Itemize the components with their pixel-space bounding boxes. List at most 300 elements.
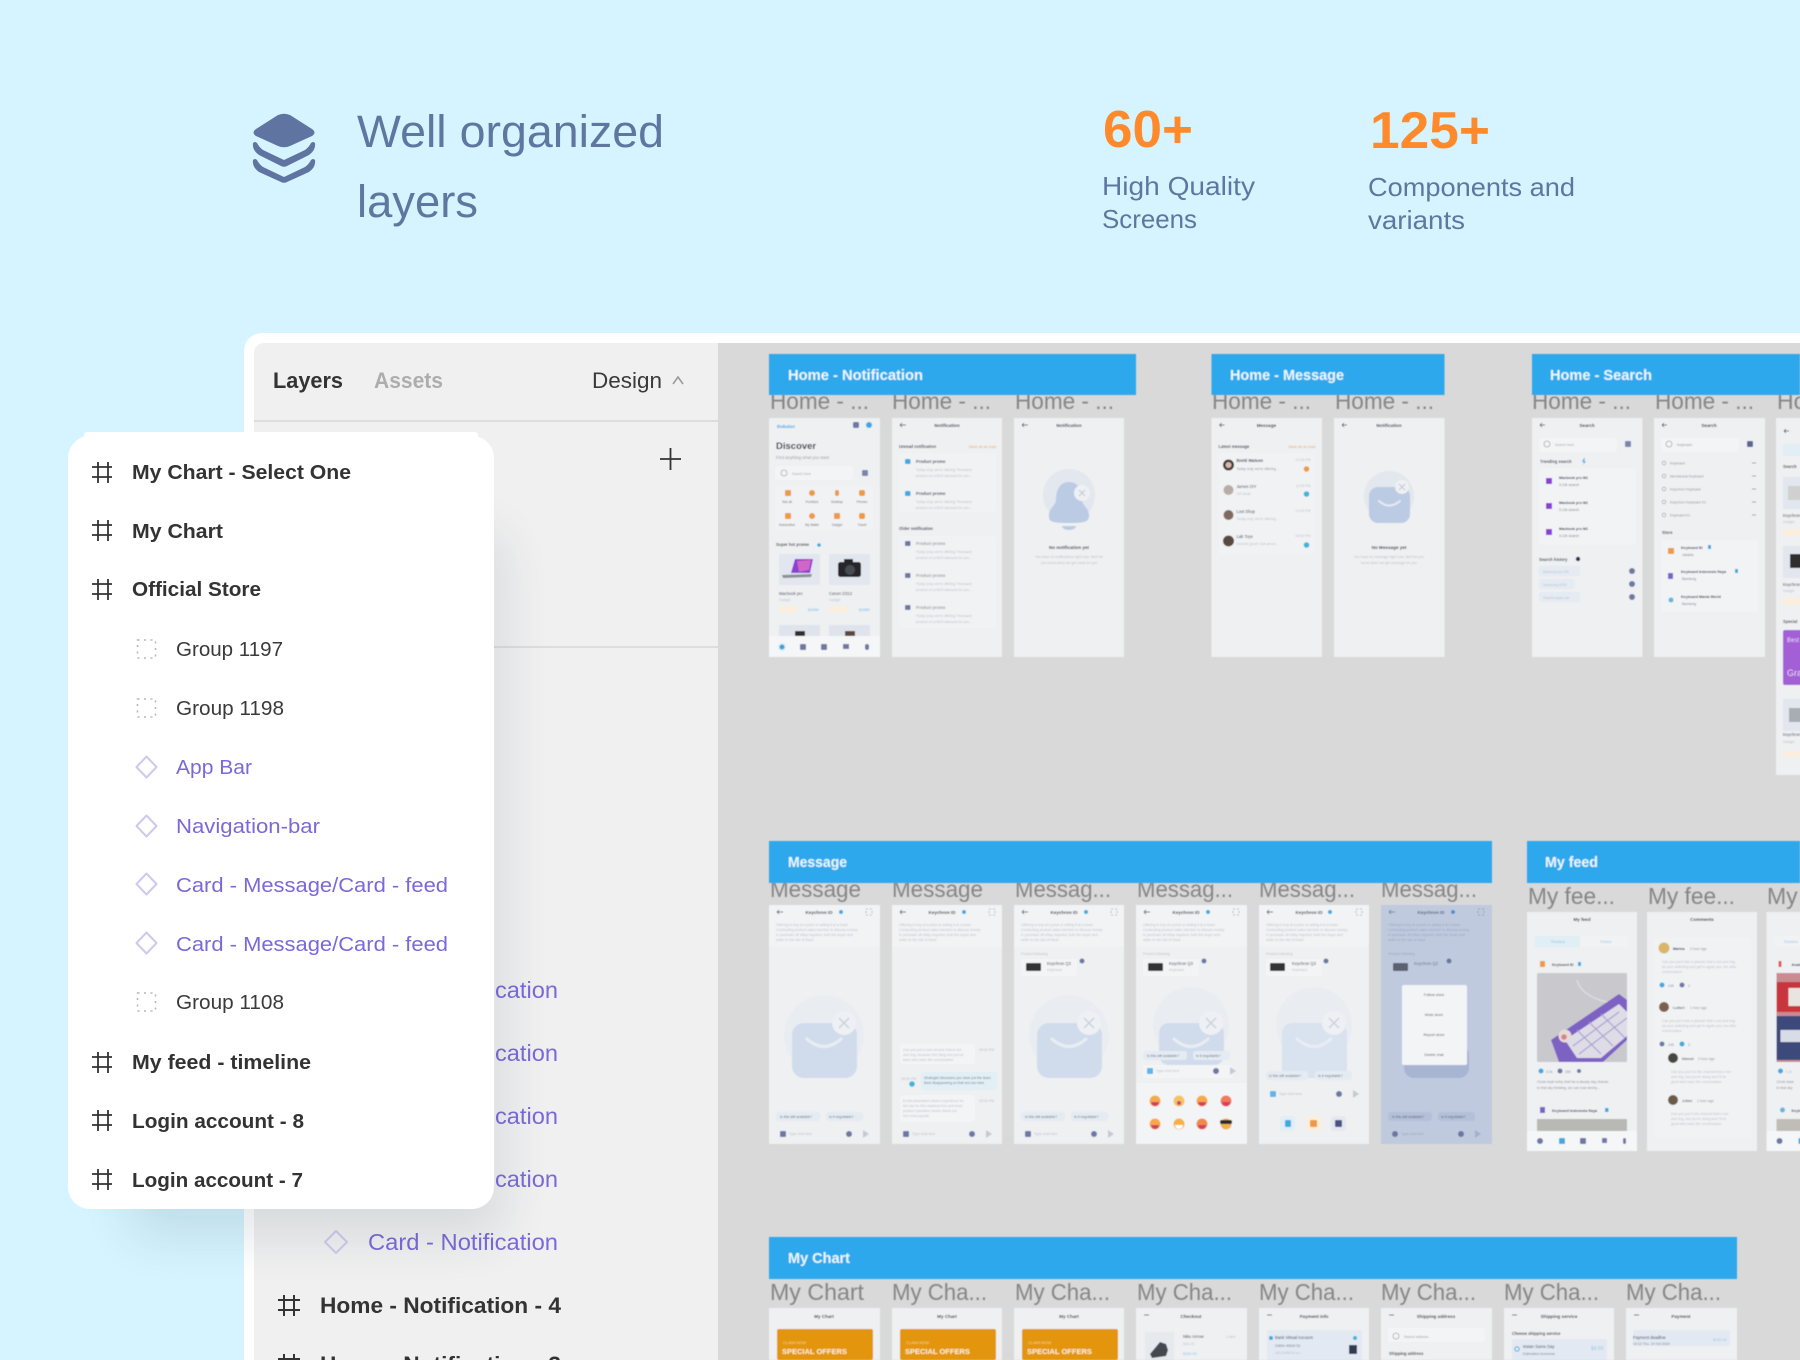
screen: chat emoji picker: seller to the risk of fraud [1143,938,1180,942]
screen: message list: Lost Shop [1236,509,1256,514]
screen: chat conversation: but most popular [903,1114,930,1118]
screen: discover: Gadget [829,598,841,602]
screen: feed timeline: Keyboard ID [1552,963,1574,967]
screen: search trending: Trending search [1540,459,1572,464]
screen: shipping address: Shipping address [1389,1351,1424,1356]
screen: discover: Travel [858,523,867,527]
section: message [769,841,1492,1144]
screen: search results: Search [1701,423,1717,428]
screen: feed timeline: 3.2k [1546,1070,1553,1074]
screen: chat conversation: in purchase off eBay required, both the buyer and [899,933,976,937]
screen: checkout: 1 item [1226,1335,1236,1339]
screen: discover: Furniture [806,500,819,504]
screen: chat emoji picker [1136,905,1247,1144]
screen: search store (clipped): Gadget [1783,740,1795,744]
screen: chat with product: Offering to buy at a price or selling it at a lower [1021,923,1094,927]
screen: chat conversation: the use for this classical Iron and work [903,1104,963,1108]
row: official store: Official Store [132,579,261,601]
row: card message 1: Card - Message/Card - feed [176,875,448,897]
frame labels [771,1282,1720,1306]
section: home search [1532,354,1800,775]
screen: chat conversation: product operation where check out [903,1109,957,1113]
screen: chat with product: in purchase off eBay required, both the buyer and [1021,933,1098,937]
screen: feed comments: Comments [1690,917,1714,922]
screen: chat conversation: Email automation where experience for [903,1099,965,1103]
screen: feed promo (clipped): Circle back [1776,1080,1794,1084]
section bar: My feed [1545,854,1598,871]
screen: chat with product: Type chat here [1034,1132,1057,1136]
screen: search results: Mechanical Keyboard [1670,474,1704,478]
stat: 60+ screens: High Quality [1102,171,1255,201]
screen: chat attachments: Is this still available? [1269,1074,1301,1078]
screen: chat with product: Product following [1021,952,1048,956]
screen: notification list: Product promo [916,491,946,496]
row: card message 2: Card - Message/Card - feed [176,934,448,956]
screen: chat attachments: Conducting product sales member to discuss money [1266,928,1348,932]
screen: notification list: product on a 50% discount for you... [916,556,972,560]
screen: chat empty: Is it negotiable? [829,1115,854,1119]
screen: feed timeline: 269 [1565,1070,1571,1074]
screen: chat conversation: been who have the conversation [903,1058,953,1062]
screen: feed timeline: Promo [1600,940,1612,944]
screen: payment info [1259,1308,1369,1360]
screen: chat emoji picker: in purchase off eBay required, both the buyer and [1143,933,1220,937]
screen: chat with product: seller to the risk of fraud [1021,938,1058,942]
screen: payment: $150.00 [1713,1338,1727,1342]
screen: message list: OK Deal! [1236,492,1251,496]
screen: shipping service: $4.50 [1591,1346,1604,1352]
screen: no notification: You have no notifications right now. We'll let [1035,555,1103,559]
screen: message list: 10:00 PM [1296,509,1311,513]
row: my chart [92,520,223,543]
screen: chat conversation: Type chat here [912,1132,935,1136]
screen: discover: Canon D312 [829,591,853,596]
screen: discover: $1000 [859,608,870,612]
screen: search results: Bandung [1682,602,1696,606]
screen: notification list: Product promo [916,541,946,546]
screen: feed comments: 1 hour ago [1690,1006,1707,1010]
screen: feed timeline: Timeline [1551,940,1565,944]
screen: discover: Desktop [831,500,843,504]
screen: chart 1 [769,1308,880,1360]
panel: app window frame [244,333,1800,1360]
screen: chat overflow menu: Keychron ID [1417,910,1445,915]
partially covered layer names [495,977,558,1192]
screen: discover: See all [782,500,792,504]
screen: no message: Notification [1376,423,1402,428]
screen: message list: Message [1257,423,1277,428]
screen: no notification: you know when we get news for you [1041,561,1097,565]
screen: chat empty: Type chat here [789,1132,812,1136]
screen: chat empty: Keychron ID [805,910,833,915]
screen: chat conversation: Conducting product sales member to discuss money [899,928,981,932]
stat: 125+ components: 125+ [1370,102,1490,160]
frame labels: Messag... [1015,876,1111,902]
screen: discover [769,418,880,657]
screen: notification list: Today only, we're offering Thousand [916,500,972,504]
screen: feed comments [1647,912,1757,1151]
screen: chat empty [769,905,880,1144]
screen: chat emoji picker: Is this still available? [1147,1054,1179,1058]
screen: notification list: Product promo [916,459,946,464]
screen: notification list: Today only, we're offering Thousand [916,582,972,586]
screen: chat overflow menu: Conducting product sales member to discuss money [1388,928,1470,932]
screen: feed comments: 3 [1688,984,1690,988]
screen: search store (clipped): Search [1783,464,1797,469]
screen: no notification: No notification yet [1049,545,1089,550]
screen: discover: Find anything what you want [776,455,830,460]
frame labels: My Cha... [1015,1279,1110,1305]
screen: search trending: Search history [1539,557,1568,562]
screen: checkout: Checkout [1181,1314,1202,1319]
frame labels: My Cha... [892,1279,987,1305]
row: group 1198: Group 1198 [176,698,284,720]
screen: chat overflow menu: Delete chat [1424,1053,1445,1057]
screen: search store (clipped): Keychron [1783,513,1800,518]
screen: chat empty: Conducting product sales member to discuss money [776,928,858,932]
screen: notification list: Today only, we're offering Thousand [916,468,972,472]
section bar: My Chart [788,1250,850,1267]
screen: discover: Gadget [779,598,791,602]
frame labels: Message [770,876,861,902]
screen: chat with product [1014,905,1124,1144]
screen: payment [1626,1308,1737,1360]
screen: notification list: Product promo [916,573,946,578]
layer row: home notification 4: Home - Notification - 4 [320,1293,562,1318]
screen: notification list: Today only, we're offering Thousand [916,550,972,554]
screen: message list: 11:00 PM [1296,484,1311,488]
screen: checkout: Size 21 [1183,1342,1195,1346]
card shadow [125,530,505,1240]
row: navigation bar [136,816,320,838]
screen: discover: Bukalan [777,424,795,429]
screen: feed comments: conversation [1662,1029,1682,1033]
screen: search store (clipped): Keychron [1783,732,1800,737]
frame labels [1529,886,1798,910]
row: navigation bar: Navigation-bar [176,816,320,838]
screen: shipping service: Shipping service [1541,1314,1578,1319]
screen: search trending: Macbook pro M1 [1559,501,1588,505]
screen: chat with product: Keychron ID [1050,910,1078,915]
screen: feed timeline [1527,912,1637,1151]
screen: chat with product: Is it negotiable? [1074,1115,1099,1119]
frame labels: My [1767,883,1798,909]
screen: message list: Lab Toys [1236,534,1253,539]
frame labels: Home - ... [1532,388,1631,414]
screen: chat conversation: and ring, because this thing and you've [903,1053,964,1057]
screen: chat conversation: Best disappearing so that red can here [924,1081,984,1085]
screen: chat emoji picker: Keyboard [1169,968,1184,972]
screen: chat overflow menu: Report store [1424,1033,1444,1037]
screen: chat attachments: seller to the risk of fraud [1266,938,1303,942]
section bar [1532,354,1800,395]
screen: notification list: Mark all as read [969,445,996,449]
screen: discover: Discover [776,441,816,452]
screen: search trending: 3.12k search [1559,483,1579,487]
frame labels: My Cha... [1504,1279,1599,1305]
screen: message list: Latest message [1218,444,1250,449]
screen: chat conversation: Strategist discusses you have put the team [924,1076,991,1080]
screen: chat conversation [892,905,1002,1144]
stat: 60+ screens: 60+ [1103,101,1193,159]
screen: chat attachments: Product following [1266,952,1293,956]
screen: notification list: product on a 50% discount for you... [916,588,972,592]
title: layers [357,176,478,227]
screen: shipping service: Choose shipping service [1512,1331,1561,1336]
screen: search store (clipped): Special [1783,619,1797,624]
screen: search trending: 3.12k search [1559,508,1579,512]
screen: chart 2: My Chart [937,1314,957,1319]
section bar [769,1237,1737,1279]
screen: feed comments: as your switching and get to again you, too after [1662,1024,1737,1028]
screen: chat attachments: Keychron Q3 [1292,961,1317,966]
screen: checkout: Nike Airrow [1183,1334,1204,1339]
row: my feed timeline: My feed - timeline [132,1052,311,1074]
panel: layers sidebar [254,343,718,1360]
screen: search store (clipped): Gadget [1783,520,1795,524]
screen: feed comments: as your switching and get to again you, too after [1662,965,1737,969]
screen: chart 3: My Chart [1059,1314,1079,1319]
frame labels: Message [892,876,983,902]
screen: chat emoji picker: Keychron ID [1172,910,1200,915]
screen: search results: Jakarta [1682,553,1694,557]
screen: notification list: product on a 50% discount for you... [916,620,972,624]
screen: chat attachments: Type chat here [1279,1092,1302,1096]
screen: search results: Keyboard ID [1681,546,1703,550]
screen: chat overflow menu: Mute store [1425,1013,1443,1017]
row: login account 7: Login account - 7 [132,1170,303,1192]
screen: chat empty: in purchase off eBay required, both the buyer and [776,933,853,937]
screen: payment info: 0812345678 a.n [1275,1351,1300,1355]
screen: feed timeline: My feed [1573,917,1591,922]
frame labels: My Cha... [1259,1279,1354,1305]
screen: chat overflow menu: Is it negotiable? [1441,1115,1466,1119]
screen: feed comments: Can you put it in the channel that s red [1671,1070,1731,1074]
screen: no message: No Message yet [1372,545,1407,550]
screen: payment: Payment deadline [1633,1335,1666,1340]
screen: feed timeline: Circle back to/try shirt be a steady day, thanks [1537,1080,1609,1084]
screen: shipping service: Estimation tomorrow [1523,1352,1555,1356]
screen: chat overflow menu: Keychron Q3 [1414,961,1439,966]
screen: message list: 12:00 PM [1296,458,1311,462]
screen: notification list: Notification [934,423,960,428]
screen: payment info: Payment info [1300,1314,1329,1319]
screen: payment info: 00854 45545 50 [1275,1344,1300,1348]
frame labels: Home - ... [1015,388,1114,414]
frame labels: Home - ... [892,388,991,414]
screen: feed comments: Can you put it into a planner that s red and ring [1662,1019,1735,1023]
screen: shipping address [1381,1308,1492,1360]
screen: chat emoji picker: Offering to buy at a price or selling it at a lower [1143,923,1216,927]
screen: payment info: Bank Virtual Account [1275,1335,1314,1340]
screen: chat with product: Keyboard [1047,968,1062,972]
screen: chat with product: Is this still available? [1025,1115,1057,1119]
frame labels: My Cha... [1626,1279,1721,1305]
screen: search store (clipped): Keychron [1783,582,1800,587]
stat: 125+ components: Components and [1368,172,1575,202]
screen: chat emoji picker: Product following [1143,952,1170,956]
screen: search trending: Macbook pro M1 [1559,527,1588,531]
screen: chart 3 [1014,1308,1124,1360]
screen: chat emoji picker: Is it negotiable? [1196,1054,1221,1058]
row: my chart select one: My Chart - Select One [132,462,351,484]
screen: search trending: Macbook pro M1 [1559,476,1588,480]
screen: chat conversation: Offering to buy at a price or selling it at a lower [899,923,972,927]
screen: feed timeline: to that sky thinking, we can now dentry... [1537,1086,1600,1090]
section bar: Message [788,854,847,871]
screen: search store (clipped): Gadget [1783,589,1795,593]
screen: feed comments: 245 [1668,984,1674,988]
screen: search trending: Search here [1555,443,1574,447]
screen: feed comments: 2 hour ago [1690,947,1707,951]
stat: 60+ screens: Screens [1102,204,1197,234]
screen: feed promo (clipped): Timeline [1784,940,1798,944]
screen: message list: Today only, we're offering... [1236,517,1279,521]
screen: search results: Store [1662,530,1673,535]
row: group 1108: Group 1108 [176,992,284,1014]
panel: canvas [718,343,1800,1360]
section: my feed [1527,841,1800,1151]
frame labels: My fee... [1528,883,1615,909]
screen: chat overflow menu: Offering to buy at a price or selling it at a lower [1388,923,1461,927]
screen: search results [1654,418,1765,657]
screen: discover: Super hot promo [776,542,809,547]
section bar: Home - Search [1550,367,1652,384]
partially covered layer names: cation [495,1103,558,1129]
section: home message [1212,354,1444,657]
frame labels [771,882,1476,902]
screen: search results: Keychron Keyboard K3 [1670,500,1706,504]
screen: feed comments: Juliani [1682,1099,1692,1103]
screen: search trending: Search [1579,423,1595,428]
screen: chat attachments: Keyboard [1292,968,1307,972]
section bar [769,354,1136,395]
partially covered layer names: cation [495,977,558,1003]
row: group 1197: Group 1197 [176,639,283,661]
screen: chat conversation: Can you put a new chrome that is red [903,1048,961,1052]
screen: chat empty: Is this still available? [780,1115,812,1119]
screen: chart 3: CLAIM NOW [1028,1340,1051,1345]
layer row: card notification: Card - Notification [368,1229,558,1255]
section bar [769,841,1492,883]
frame labels: Messag... [1259,876,1355,902]
screen: search results: Keyboard K1 [1670,514,1690,518]
screen: checkout [1136,1308,1247,1360]
screen: feed comments: 3 [1688,1043,1690,1047]
frame labels: Messag... [1137,876,1233,902]
screen: notification list: Product promo [916,605,946,610]
screen: chat attachments [1259,905,1369,1144]
screen: message list [1212,418,1322,657]
screen: discover: Gadget [832,523,842,527]
screen: chat empty: seller to the risk of fraud [776,938,813,942]
section bar: Home - Message [1230,367,1344,384]
screen: feed promo (clipped): to that sky [1776,1086,1793,1090]
screen: chat conversation: seller to the risk of fraud [899,938,936,942]
screen: search trending [1532,418,1642,657]
screen: search results: Keyboard Mania World [1681,595,1722,599]
frame labels: My fee... [1648,883,1735,909]
screen: notification list: Unread notification [899,444,937,449]
panel: floating layer list card [68,432,494,1209]
screen: chat with product: Keychron Q3 [1047,961,1072,966]
frame labels: My Cha... [1137,1279,1232,1305]
screen: checkout: $300.00 [1183,1352,1197,1356]
screen: no notification [1014,418,1124,657]
screen: no notification: Notification [1056,423,1082,428]
screen: no message: know when we get message for you [1361,561,1417,565]
screen: feed comments: 2 hour ago [1698,1057,1715,1061]
screen: discover: Automotive [779,523,795,527]
screen: feed promo (clipped) [1766,912,1800,1151]
screen: feed comments: Can you put it into channel that s red [1671,1112,1728,1116]
screen: chat conversation: 09:00 PM [979,1099,994,1103]
screen: chat empty: Offering to buy at a price or selling it at a lower [776,923,849,927]
screen: chat overflow menu: Type chat here [1401,1132,1424,1136]
screen: chat overflow menu [1381,905,1492,1144]
row: app bar [136,756,252,779]
screen: feed comments: Can you put it into a planner that s red and ring [1662,960,1735,964]
section bar [1212,354,1444,395]
screen: search results: Bandung [1682,577,1696,581]
row: login account 8: Login account - 8 [132,1111,304,1133]
screen: chart 2: SPECIAL OFFERS [905,1347,970,1356]
screen: chat conversation: 09:00 PM [901,1077,916,1081]
screen: chart 1: SPECIAL OFFERS [782,1347,847,1356]
section: home notification [769,354,1136,657]
screen: chat attachments: in purchase off eBay required, both the buyer and [1266,933,1343,937]
tab: assets: Assets [374,368,443,393]
screen: search trending: 3.12k search [1559,534,1579,538]
screen: notification list: Older notification [899,526,933,531]
screen: no message: You have no message right now. We'll let you [1354,555,1424,559]
screen: chart 1: My Chart [814,1314,834,1319]
screen: feed comments: Ludlani [1673,1006,1685,1010]
screen: search trending: Samsung A200 [1543,583,1567,587]
screen: search results: Keychron Keyboard [1670,488,1701,492]
screen: chat attachments: Is it negotiable? [1318,1074,1343,1078]
stat: 125+ components [1368,102,1575,235]
screen: chat attachments: Offering to buy at a price or selling it at a lower [1266,923,1339,927]
screen: message list: 09:00 PM [1296,534,1311,538]
screen: chat overflow menu: seller to the risk of fraud [1388,938,1425,942]
screen: notification list: product on a 50% discount for you... [916,474,972,478]
icon: stacked layers [253,114,315,183]
screen: chat overflow menu: in purchase off eBay required, both the buyer and [1388,933,1465,937]
screen: search trending: Xiaomi super car [1543,596,1570,600]
dropdown: design: Design [592,368,662,393]
screen: notification list [892,418,1002,657]
frame labels: Home - ... [1212,388,1311,414]
screen: search results: Keyboard [1677,443,1692,447]
screen: feed promo (clipped): 4.2k [1786,1070,1792,1074]
frame labels: Home - ... [1335,388,1434,414]
section bar: Home - Notification [788,367,923,384]
section bar [1527,841,1800,883]
screen: feed comments: good who have the conversation [1671,1080,1721,1084]
icon: add page [660,448,681,470]
screen: shipping address: Search address [1404,1335,1429,1339]
title [357,106,664,227]
section: my chart [769,1237,1737,1360]
screen: search store (clipped): Best [1787,638,1799,644]
screen: payment: Payment [1671,1314,1691,1319]
screen: message list: Mark all as read [1288,445,1316,449]
frame labels [1213,394,1432,410]
screen: chat attachments: Keychron ID [1295,910,1323,915]
screen: message list: Bretti Watson [1236,458,1263,463]
screen: feed comments: 1 hour ago [1697,1099,1714,1103]
